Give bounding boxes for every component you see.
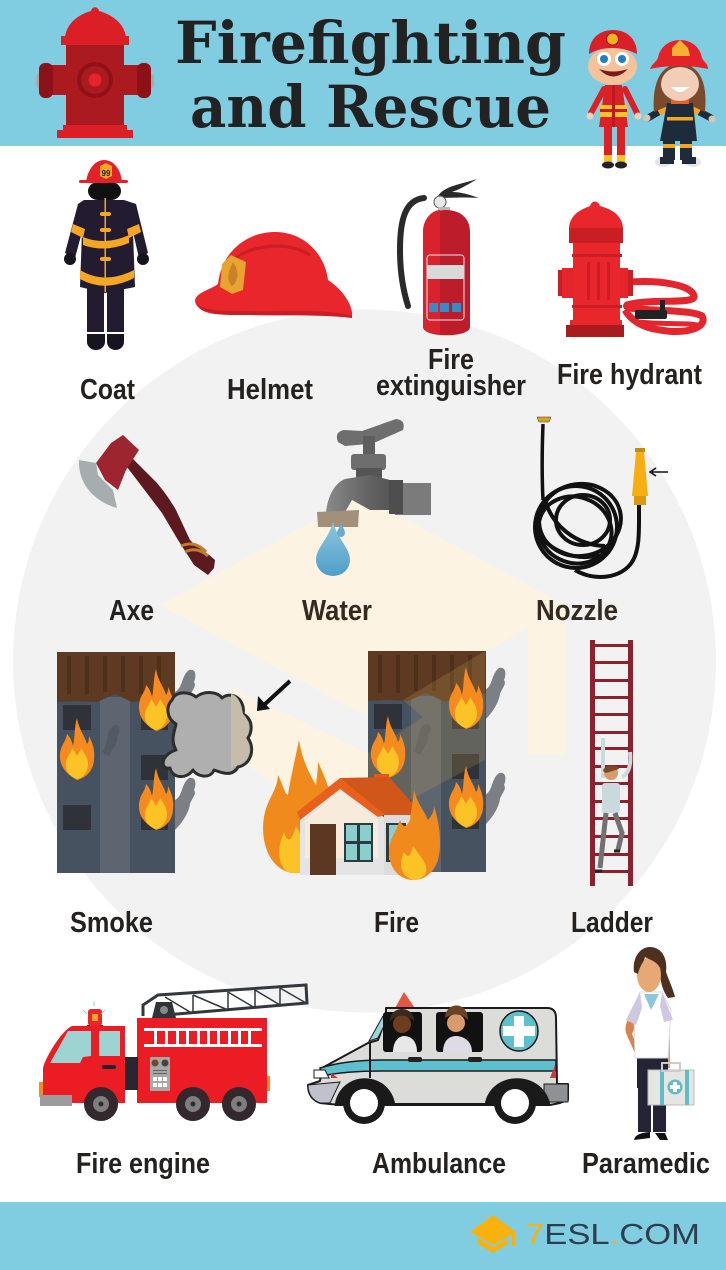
icon: axe xyxy=(79,435,215,575)
icon: ladder with climber xyxy=(590,640,633,886)
icon: smoke cloud xyxy=(163,693,252,777)
label: Fire extinguisher: Fire xyxy=(428,344,474,376)
icon: burning house xyxy=(263,740,440,880)
label: Axe: Axe xyxy=(109,595,154,627)
logo: 7ESL.COM: 7ESL .COM xyxy=(525,1219,700,1251)
background circle xyxy=(13,310,716,1012)
icon: fire extinguisher xyxy=(400,179,479,335)
label: Fire hydrant: Fire hydrant xyxy=(557,359,702,391)
label: Fire extinguisher: extinguisher xyxy=(376,370,526,402)
label: Helmet: Helmet xyxy=(227,374,313,406)
icon: firefighter boy xyxy=(586,30,642,168)
title: Firefighting xyxy=(175,9,566,77)
label: Paramedic: Paramedic xyxy=(582,1148,710,1180)
arrow: to smoke xyxy=(257,681,290,711)
watermark: graduation cap xyxy=(160,495,565,800)
icon: coat xyxy=(64,160,149,350)
label: Smoke: Smoke xyxy=(70,907,153,939)
title xyxy=(175,9,566,141)
icon: paramedic xyxy=(625,947,694,1140)
icon: water tap xyxy=(316,419,431,576)
top banner xyxy=(0,0,726,146)
icon: helmet xyxy=(195,232,352,318)
icon: ambulance xyxy=(308,992,568,1124)
title: and Rescue xyxy=(190,73,551,141)
label: Fire: Fire xyxy=(374,907,419,939)
label: Fire extinguisher xyxy=(376,344,526,402)
bottom banner xyxy=(0,1202,726,1270)
icon: nozzle hose xyxy=(526,417,668,577)
icon: coat: 99 xyxy=(102,169,111,178)
label: Fire engine: Fire engine xyxy=(76,1148,210,1180)
icon: right burning building xyxy=(368,651,505,872)
icon: header hydrant xyxy=(36,7,154,138)
icon: firefighter girl xyxy=(644,40,716,167)
logo: 7ESL.COM xyxy=(470,1215,700,1253)
label: Water: Water xyxy=(302,595,372,627)
icon: fire engine xyxy=(39,985,307,1121)
icon: fire hydrant with hose xyxy=(558,202,703,337)
icon: left burning building xyxy=(57,652,195,873)
label: Ambulance: Ambulance xyxy=(372,1148,506,1180)
label: Nozzle: Nozzle xyxy=(536,595,618,627)
label: Coat: Coat xyxy=(80,374,135,406)
label: Ladder: Ladder xyxy=(571,907,653,939)
